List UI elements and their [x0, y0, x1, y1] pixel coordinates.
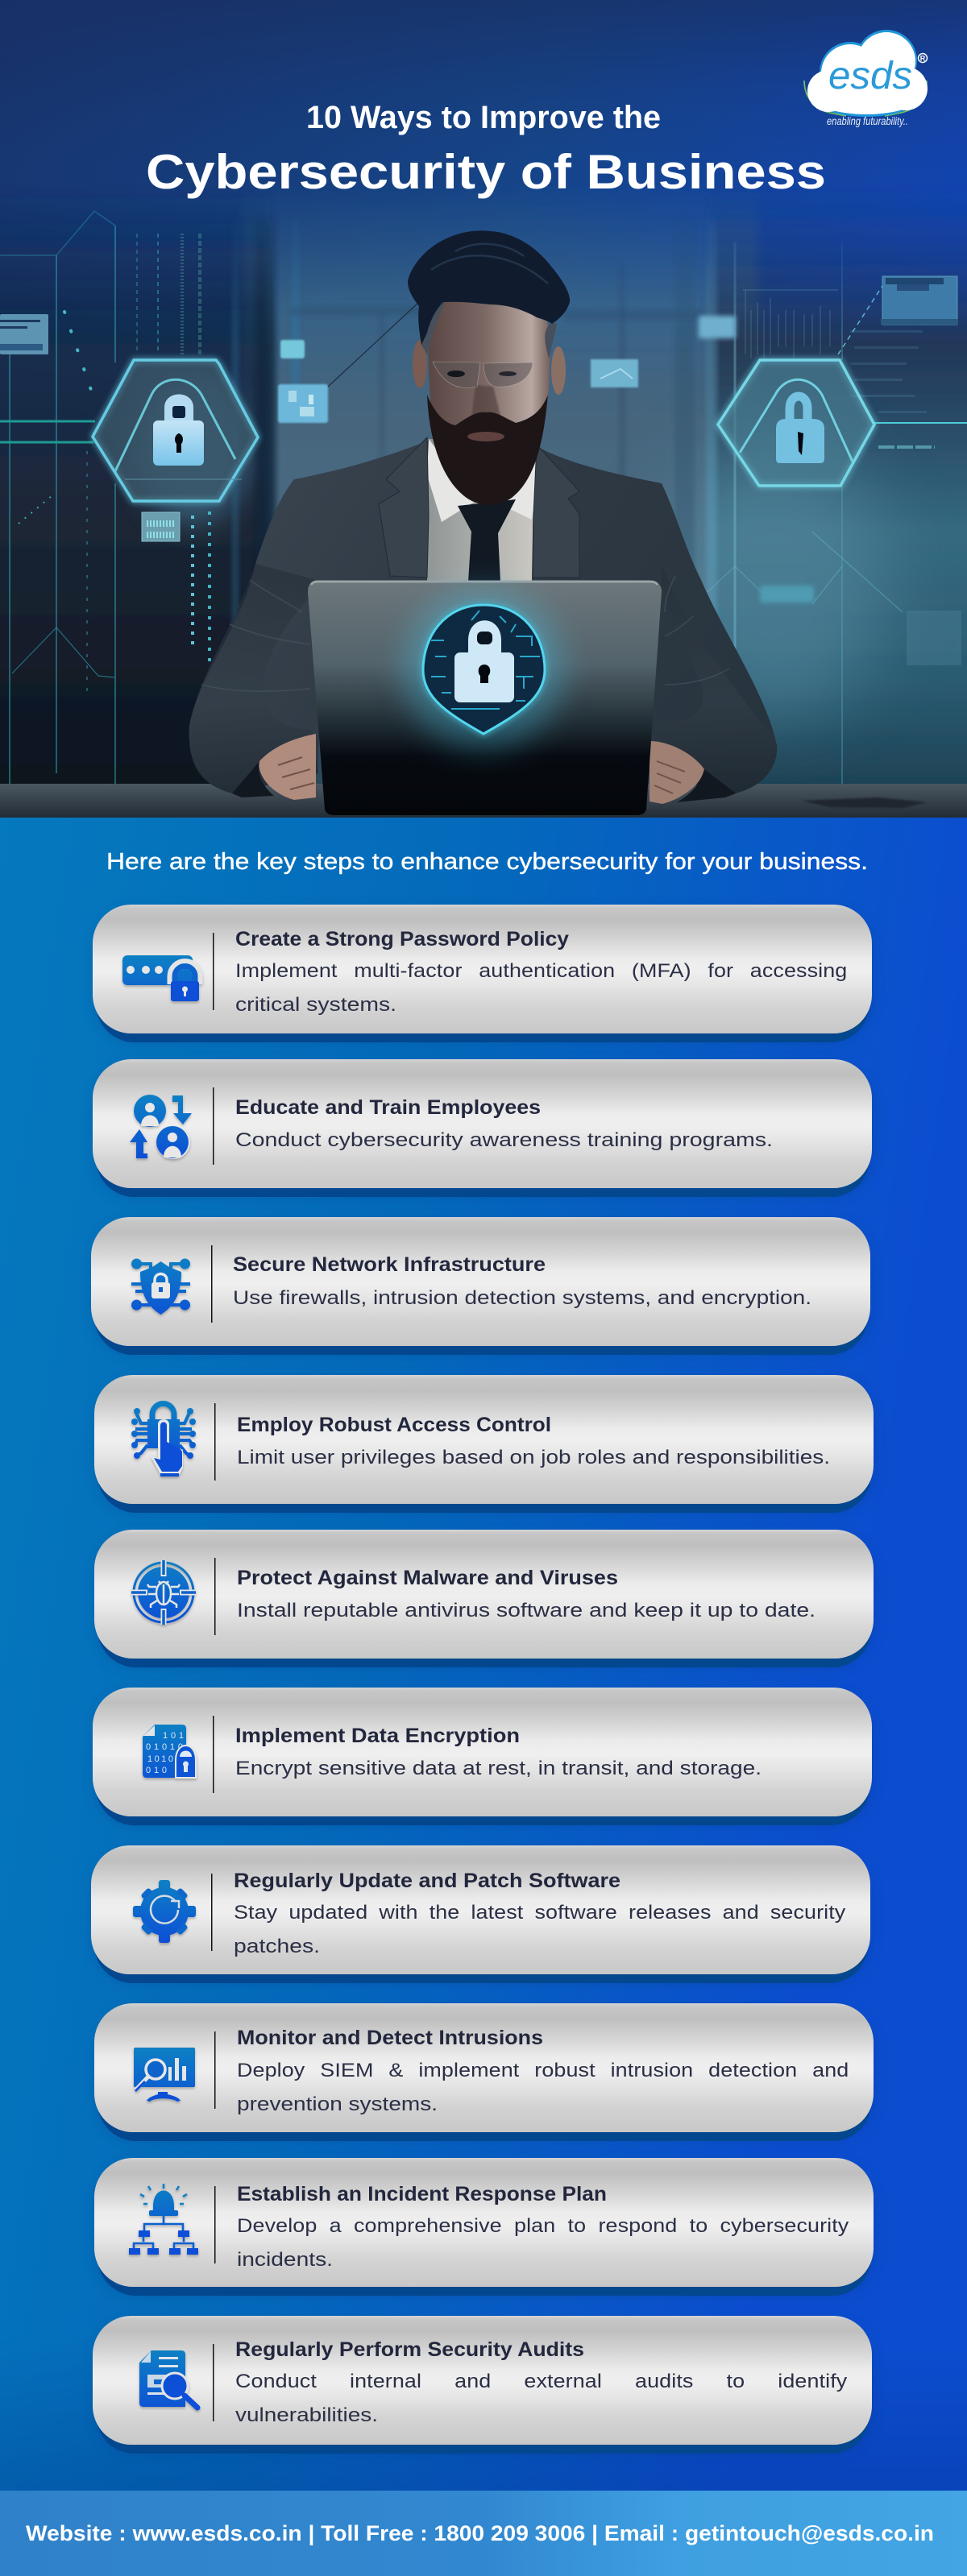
vertical light lines right [708, 234, 967, 806]
description: Stay updated with the latest software releases and security [234, 1902, 845, 1924]
description [237, 2059, 857, 2115]
lapels [379, 437, 579, 578]
description: Conduct cybersecurity awareness training programs. [235, 1129, 773, 1151]
tablet on table [802, 797, 927, 808]
description: critical systems. [235, 994, 396, 1016]
dotted data lines [19, 234, 210, 693]
card 10: audits [93, 2316, 872, 2454]
cloud [807, 32, 928, 114]
arms and jacket [189, 439, 777, 793]
icon: monitor analytics [134, 2048, 195, 2102]
logo: enabling futurability.. [827, 114, 908, 127]
hair [408, 230, 570, 358]
card 4: access control [94, 1375, 874, 1513]
description: Develop a comprehensive plan to respond to cybersecurity [237, 2215, 849, 2237]
description: incidents. [237, 2249, 333, 2271]
icon: people exchange [130, 1095, 192, 1159]
hands [232, 734, 736, 804]
left info panel [0, 314, 48, 354]
card 8: monitor [94, 2003, 874, 2141]
heading: Establish an Incident Response Plan [237, 2183, 607, 2205]
beard [427, 395, 548, 505]
glowing data boxes left [142, 340, 328, 541]
icon: bug target [131, 1560, 196, 1625]
description: prevention systems. [237, 2094, 438, 2115]
heading: Secure Network Infrastructure [233, 1253, 546, 1276]
icon: encrypted file [143, 1725, 196, 1778]
icon: encrypted file: 1 0 1 0 [147, 1754, 173, 1764]
ears [413, 340, 427, 388]
logo [804, 30, 928, 127]
title: 10 Ways to Improve the [306, 100, 661, 135]
card 6: encryption [93, 1688, 872, 1825]
card 7: update software [91, 1845, 870, 1983]
sleeve shading [189, 564, 777, 793]
icon: document search [139, 2350, 197, 2408]
table [0, 784, 967, 818]
heading: Regularly Perform Security Audits [235, 2338, 584, 2361]
icon: network shield [131, 1258, 190, 1315]
heading: Employ Robust Access Control [237, 1414, 551, 1436]
intro text: Here are the key steps to enhance cybersecurity for your business. [106, 849, 868, 875]
heading: Implement Data Encryption [235, 1725, 520, 1747]
heading: Regularly Update and Patch Software [234, 1870, 620, 1892]
title: Cybersecurity of Business [146, 145, 826, 199]
face [429, 301, 550, 425]
description: Use firewalls, intrusion detection systems, and encryption. [233, 1287, 811, 1309]
diagonal connector [328, 302, 419, 387]
businessman [189, 230, 777, 804]
glasses [433, 362, 533, 387]
icon: encrypted file: 0 1 0 [146, 1766, 167, 1775]
lower background shade [0, 2336, 967, 2491]
shield lock on laptop [423, 605, 545, 734]
title [146, 100, 826, 199]
lips [467, 432, 504, 441]
icon: password lock [122, 955, 199, 1001]
description: Deploy SIEM & implement robust intrusion detection and [237, 2060, 849, 2081]
card 2: train employees [93, 1059, 872, 1197]
nose shading [471, 385, 501, 419]
circuit lines left [0, 211, 115, 806]
server-room streaks [230, 227, 719, 627]
right info panels [591, 276, 961, 665]
description [235, 2370, 856, 2426]
tie [458, 499, 516, 582]
card 9: incident response [94, 2158, 874, 2296]
collar [427, 439, 538, 522]
hexagon lock right [718, 360, 874, 486]
card 3: network [91, 1217, 870, 1355]
description: Install reputable antivirus software and keep it up to date. [237, 1600, 816, 1621]
laptop [308, 582, 662, 815]
description: vulnerabilities. [235, 2404, 378, 2426]
hero illustration [0, 0, 967, 818]
icon: encrypted file: 1 0 1 [163, 1731, 184, 1741]
description [234, 1901, 854, 1957]
hands [804, 81, 927, 116]
description: Conduct internal and external audits to identify [235, 2371, 847, 2392]
description: Encrypt sensitive data at rest, in transit, and storage. [235, 1758, 762, 1779]
description: patches. [234, 1936, 320, 1957]
icon: alarm hierarchy [129, 2184, 198, 2255]
heading: Create a Strong Password Policy [235, 928, 569, 950]
description: Limit user privileges based on job roles and responsibilities. [237, 1447, 830, 1468]
data rain right [743, 290, 838, 362]
icon: gear update [133, 1880, 196, 1943]
card 5: malware [94, 1530, 874, 1667]
contact text: Website : www.esds.co.in | Toll Free : 1800 209 3006 | Email : getintouch@esds.co.in [26, 2521, 934, 2545]
logo: esds [828, 55, 912, 97]
description: Implement multi-factor authentication (MFA) for accessing [235, 960, 847, 982]
heading: Protect Against Malware and Viruses [237, 1567, 618, 1589]
heading: Educate and Train Employees [235, 1096, 541, 1119]
logo: R [920, 55, 926, 63]
hexagon lock left [93, 360, 258, 501]
description [235, 959, 856, 1016]
icon: encrypted file: 0 1 0 1 0 [146, 1742, 183, 1752]
description [237, 2214, 857, 2271]
card 1: password policy [93, 905, 872, 1042]
footer [0, 2491, 967, 2576]
heading: Monitor and Detect Intrusions [237, 2027, 543, 2049]
icon: lock with hand [131, 1403, 196, 1476]
cloud outline [813, 30, 919, 117]
shirt [427, 439, 534, 582]
